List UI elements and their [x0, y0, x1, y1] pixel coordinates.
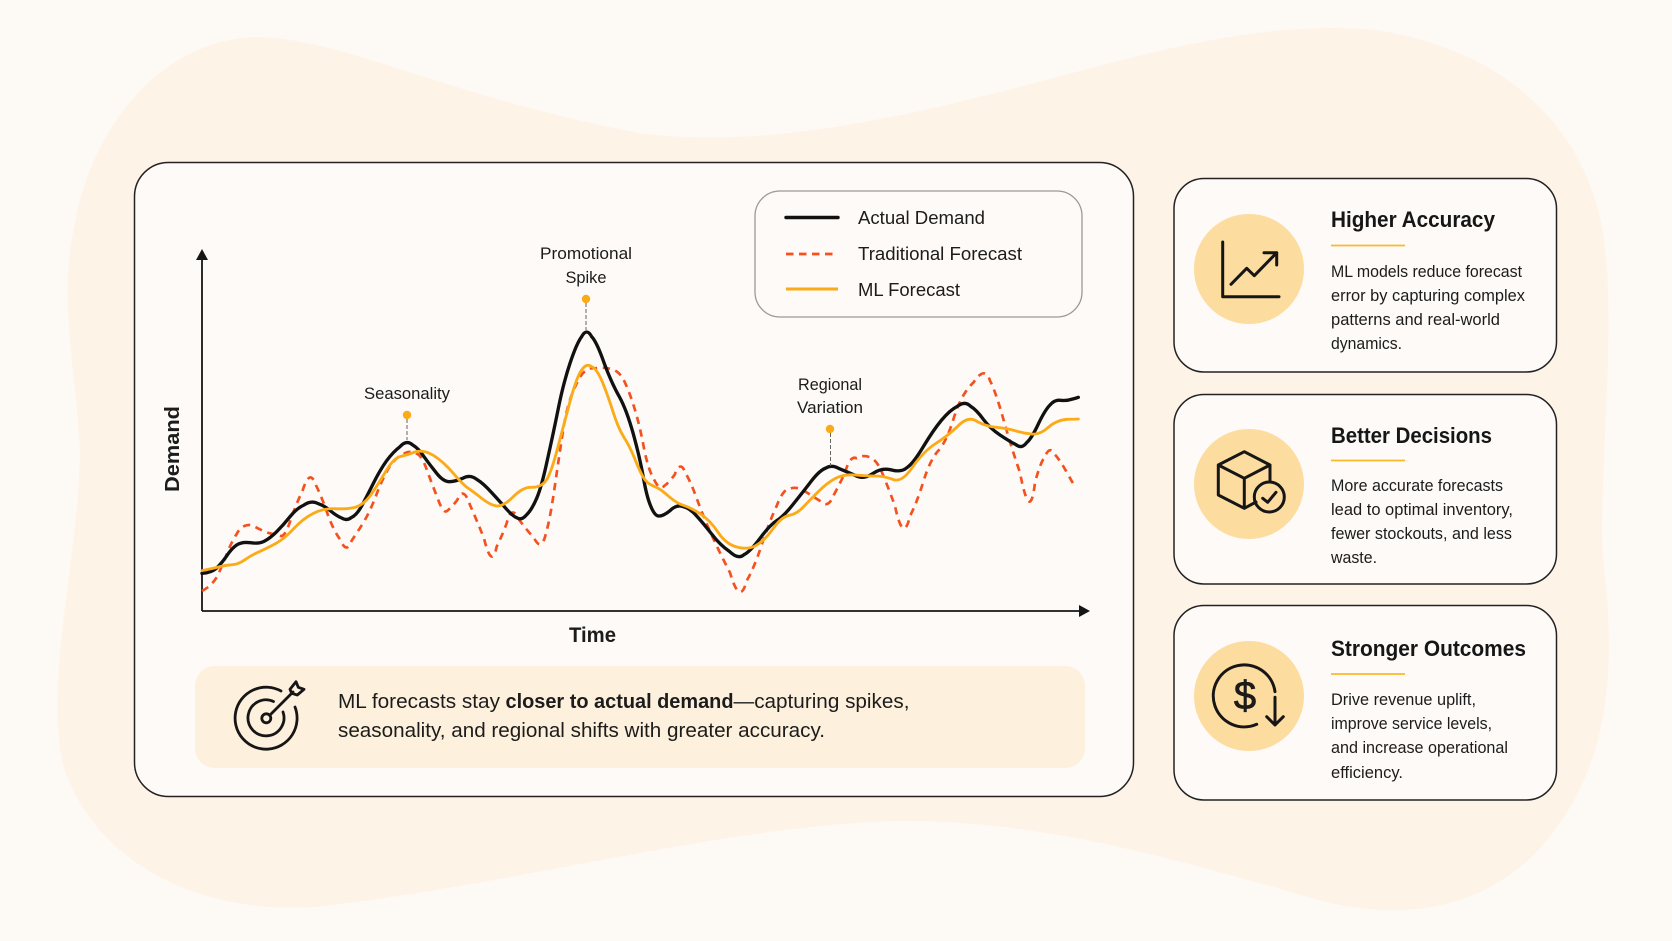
- line chart: [202, 332, 1078, 592]
- callout text: seasonality, and regional shifts with greater accuracy.: [338, 719, 825, 742]
- text block: Drive revenue uplift,: [1331, 691, 1476, 709]
- annotation: regional variation: Variation: [797, 398, 863, 417]
- callout text: —capturing spikes,: [734, 690, 910, 713]
- text block: and increase operational: [1331, 739, 1508, 757]
- text block: waste.: [1330, 549, 1377, 567]
- panel: stronger outcomes: [1174, 606, 1556, 800]
- text block: lead to optimal inventory,: [1331, 501, 1513, 519]
- text block: improve service levels,: [1331, 715, 1492, 733]
- text block: More accurate forecasts: [1331, 477, 1503, 495]
- panel: better decisions: [1174, 394, 1556, 584]
- text block: ML models reduce forecast: [1331, 263, 1522, 281]
- text block: [1331, 263, 1526, 353]
- y axis label: Demand: [162, 406, 184, 492]
- legend: Traditional Forecast: [858, 243, 1022, 264]
- annotation: regional variation: [797, 375, 863, 466]
- panel: chart: [134, 162, 1134, 796]
- panel: higher accuracy: [1174, 178, 1556, 372]
- actual demand line: [202, 332, 1078, 573]
- icon: dollar with down arrow: [1194, 641, 1304, 751]
- text block: fewer stockouts, and less: [1331, 525, 1512, 543]
- heading: Better Decisions: [1331, 423, 1492, 448]
- icon: growth chart: [1194, 214, 1304, 324]
- ml forecast line: [202, 365, 1078, 571]
- annotation: seasonality: Seasonality: [364, 384, 450, 403]
- legend: [755, 191, 1082, 317]
- heading: Higher Accuracy: [1331, 207, 1496, 232]
- icon: dollar with down arrow: $: [1234, 674, 1256, 718]
- text block: error by capturing complex: [1331, 287, 1526, 305]
- legend: Actual Demand: [858, 207, 985, 228]
- y axis: [196, 249, 208, 611]
- icon: box with check: [1194, 429, 1304, 539]
- callout: [195, 666, 1085, 768]
- text block: [1330, 477, 1513, 567]
- heading: Stronger Outcomes: [1331, 636, 1526, 661]
- text block: efficiency.: [1331, 764, 1403, 782]
- annotation: regional variation: Regional: [798, 375, 862, 394]
- callout text: [338, 690, 910, 742]
- callout text: ML forecasts stay: [338, 690, 501, 713]
- text block: [1331, 691, 1508, 782]
- icon: target with arrow: [235, 682, 304, 749]
- annotation: seasonality: [364, 384, 450, 440]
- traditional forecast line: [202, 368, 1075, 592]
- callout text: closer to actual demand: [506, 690, 734, 713]
- annotation: promotional spike: Spike: [566, 268, 606, 287]
- annotation: promotional spike: [540, 244, 632, 330]
- text block: dynamics.: [1331, 335, 1402, 353]
- text block: patterns and real-world: [1331, 311, 1500, 329]
- legend: ML Forecast: [858, 279, 960, 300]
- annotation: promotional spike: Promotional: [540, 244, 632, 263]
- x axis label: Time: [569, 624, 616, 647]
- x axis: [202, 605, 1090, 617]
